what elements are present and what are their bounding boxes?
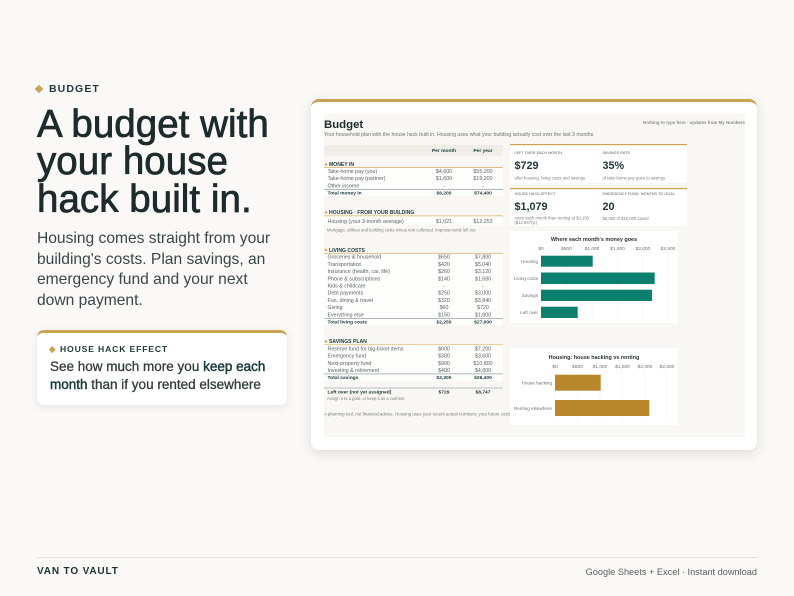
- table section: savings plan: $600: [438, 346, 450, 352]
- sheet heading: [324, 119, 746, 138]
- kpi: emergency fund: [598, 188, 687, 226]
- callout text: month than if you rented elsewhere: [50, 377, 261, 392]
- kpi: left over each month: [510, 144, 598, 183]
- chart: housing hacking vs renting: House hacking: [522, 380, 552, 386]
- intro text: Housing comes straight from your: [37, 230, 270, 247]
- table section: money in: $55,200: [473, 169, 493, 175]
- table section: living costs: $2,250: [437, 320, 452, 326]
- chart: housing hacking vs renting: $2,500: [660, 364, 675, 370]
- intro text: down payment.: [37, 292, 143, 309]
- table section: living costs: LIVING COSTS: [329, 248, 366, 254]
- chart: where each month's money goes: Left over: [520, 310, 538, 315]
- table row: left over: Assign it to a goal, or keep it as a cushion.: [327, 396, 405, 401]
- kpi: left over each month: $729: [514, 160, 539, 172]
- callout eyebrow: HOUSE HACK EFFECT: [60, 344, 168, 354]
- table section: living costs: Kids & childcare: [328, 284, 366, 290]
- kpi: house hack effect: HOUSE HACK EFFECT: [514, 192, 556, 196]
- table section: money in: $4,600: [436, 169, 452, 175]
- table section: living costs: $5,040: [475, 262, 491, 268]
- callout: house hack effect: [37, 330, 287, 405]
- table section: savings plan: Next-property fund: [328, 361, 371, 367]
- table section: savings plan: [324, 339, 503, 381]
- chart: housing hacking vs renting: $0: [552, 364, 558, 370]
- table section: living costs: $60: [440, 305, 448, 311]
- kpi: savings rate: of take-home pay goes to savings: [602, 176, 665, 180]
- table section: living costs: Transportation: [328, 262, 362, 268]
- table section: money in: [324, 162, 503, 197]
- table section: living costs: Total living costs: [328, 320, 367, 326]
- chart: where each month's money goes: Savings: [522, 293, 539, 298]
- title: [36, 103, 269, 221]
- table section: living costs: $650: [438, 255, 450, 261]
- table section: savings plan: Investing & retirement: [328, 368, 380, 374]
- table section: savings plan: $900: [438, 361, 450, 367]
- table section: living costs: $7,800: [475, 255, 491, 261]
- table section: living costs: Insurance (health, car, life): [328, 269, 390, 275]
- table section: money in: $1,600: [436, 176, 452, 182]
- chart: where each month's money goes: [510, 231, 678, 323]
- table row: left over: $729: [439, 390, 450, 396]
- table section: savings plan: $4,800: [475, 368, 491, 374]
- table section: housing: $1,021: [436, 219, 452, 225]
- table section: money in: Total money in: [328, 191, 362, 197]
- table section: money in: MONEY IN: [329, 162, 354, 168]
- kpi: house hack effect: [510, 188, 598, 226]
- chart: where each month's money goes: $1,500: [610, 246, 625, 252]
- table section: living costs: -: [482, 284, 484, 290]
- kpi: house hack effect: more each month than renting at $2,100: [514, 216, 590, 220]
- table section: living costs: $260: [438, 269, 450, 275]
- table section: money in: $6,200: [437, 191, 452, 197]
- table section: living costs: Groceries & household: [328, 255, 381, 261]
- table section: savings plan: $7,200: [475, 346, 491, 352]
- table section: living costs: Fun, dining & travel: [328, 298, 373, 304]
- table section: living costs: Phone & subscriptions: [328, 276, 381, 282]
- table section: money in: Take-home pay (partner): [328, 176, 386, 182]
- table row: left over: [324, 388, 503, 401]
- table section: living costs: Everything else: [328, 312, 364, 318]
- table section: housing: Mortgage, utilities and building costs minus rent collected. Improvements left out.: [327, 228, 477, 232]
- kpi: savings rate: 35%: [602, 160, 625, 172]
- chart: where each month's money goes: $2,500: [661, 246, 676, 252]
- table section: housing: $12,253: [473, 219, 493, 225]
- footer rule: [37, 557, 757, 558]
- chart: where each month's money goes: Living costs: [514, 276, 539, 281]
- table section: money in: -: [443, 183, 445, 189]
- footer brand: VAN TO VAULT: [37, 566, 119, 577]
- table section: living costs: $3,000: [475, 291, 491, 297]
- table section: savings plan: Emergency fund: [328, 354, 366, 360]
- table section: living costs: $3,120: [475, 269, 491, 275]
- table section: money in: Take-home pay (you): [328, 169, 377, 175]
- table section: savings plan: $10,800: [473, 361, 493, 367]
- chart: where each month's money goes: $0: [538, 246, 544, 252]
- table section: living costs: $420: [438, 262, 450, 268]
- kpi: emergency fund: EMERGENCY FUND: MONTHS TO GOAL: [602, 192, 675, 196]
- chart: housing hacking vs renting: Renting elsewhere: [514, 406, 552, 411]
- intro text: [37, 230, 270, 309]
- title: hack built in.: [37, 178, 252, 221]
- table section: savings plan: Total savings: [328, 375, 359, 381]
- callout text: See how much more you keep each: [50, 359, 265, 374]
- kpi: house hack effect: $1,079: [514, 201, 548, 213]
- table section: housing: Housing (your 3-month average): [328, 219, 404, 225]
- table section: money in: -: [482, 183, 484, 189]
- table section: living costs: $150: [438, 312, 450, 318]
- kpi: savings rate: SAVINGS RATE: [602, 151, 630, 155]
- sheet heading: Your household plan with the house hack built in. Housing uses what your building actually cost over the last 3 months.: [324, 132, 595, 138]
- chart: where each month's money goes: $500: [561, 246, 572, 252]
- table section: money in: Other income: [328, 183, 359, 189]
- chart: where each month's money goes: $2,000: [636, 246, 651, 252]
- kpi: emergency fund: 20: [602, 201, 615, 213]
- sheet heading: Budget: [324, 119, 363, 131]
- table section: living costs: $27,000: [474, 320, 492, 326]
- table section: savings plan: Reserve fund for big-ticket items: [328, 346, 404, 352]
- table section: savings plan: SAVINGS PLAN: [329, 339, 367, 345]
- table section: savings plan: $26,400: [474, 375, 492, 381]
- table section: money in: $74,400: [474, 191, 492, 197]
- chart: where each month's money goes: Where each month's money goes: [551, 237, 637, 243]
- callout text: [50, 359, 265, 392]
- table section: savings plan: $400: [438, 368, 450, 374]
- table row: left over: Left over (not yet assigned): [328, 390, 392, 396]
- kpi: house hack effect: ($12,947/yr): [514, 220, 538, 225]
- table row: left over: $8,747: [476, 390, 491, 396]
- footer note: Google Sheets + Excel · Instant download: [586, 566, 757, 576]
- table section: living costs: $3,840: [475, 298, 491, 304]
- title: A budget with: [37, 103, 269, 146]
- kpi: emergency fund: $5,000 of $15,000 saved: [602, 216, 649, 221]
- table section: housing: [324, 210, 503, 232]
- eyebrow: budget: BUDGET: [49, 83, 100, 95]
- kpi: savings rate: [598, 144, 687, 183]
- table header: Per year: [473, 148, 493, 154]
- table section: living costs: $1,800: [475, 312, 491, 318]
- table section: living costs: Giving: [328, 305, 343, 311]
- intro text: building's costs. Plan savings, an: [37, 251, 265, 268]
- sheet heading: Nothing to type here · updates from My Numbers: [643, 120, 746, 125]
- intro text: emergency fund and your next: [37, 271, 248, 288]
- table header: [324, 145, 503, 156]
- table section: living costs: [324, 248, 503, 326]
- table section: living costs: $720: [477, 305, 489, 311]
- panel: spreadsheet card: [311, 99, 757, 450]
- table section: living costs: $320: [438, 298, 450, 304]
- table section: living costs: Debt payments: [328, 291, 363, 297]
- table section: living costs: $140: [438, 276, 450, 282]
- table section: living costs: $1,680: [475, 276, 491, 282]
- table section: savings plan: $2,200: [437, 375, 452, 381]
- table section: savings plan: $3,600: [475, 354, 491, 360]
- kpi: left over each month: LEFT OVER EACH MONTH: [514, 151, 562, 155]
- chart: where each month's money goes: Housing: [521, 259, 538, 264]
- chart: housing hacking vs renting: $500: [572, 364, 583, 370]
- table section: savings plan: $300: [438, 354, 450, 360]
- chart: where each month's money goes: $1,000: [585, 246, 600, 252]
- table section: living costs: -: [443, 284, 445, 290]
- chart: housing hacking vs renting: [510, 348, 678, 425]
- table header: Per month: [432, 148, 456, 154]
- chart: housing hacking vs renting: Housing: house hacking vs renting: [549, 355, 639, 361]
- table section: living costs: $250: [438, 291, 450, 297]
- table section: housing: HOUSING · FROM YOUR BUILDING: [329, 210, 414, 216]
- chart: housing hacking vs renting: $2,000: [638, 364, 653, 370]
- table section: money in: $19,200: [473, 176, 493, 182]
- chart: housing hacking vs renting: $1,000: [593, 364, 608, 370]
- kpi: left over each month: after housing, living costs and savings: [514, 176, 585, 180]
- title: your house: [37, 140, 228, 183]
- disclaimer: A planning tool, not financial advice. Housing uses your recent actual numbers; your future costs and in: [324, 412, 525, 416]
- chart: housing hacking vs renting: $1,500: [615, 364, 630, 370]
